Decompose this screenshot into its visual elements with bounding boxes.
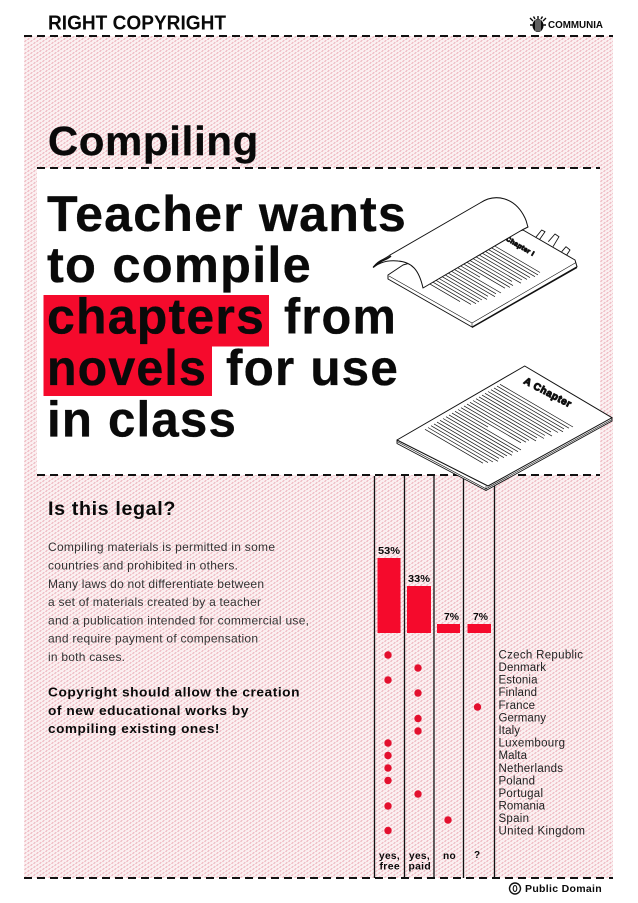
country list: France [498, 700, 535, 712]
top sheet [397, 366, 612, 486]
body text: a set of materials created by a teacher [48, 595, 261, 609]
country list: Estonia [498, 674, 538, 686]
country list: Luxembourg [498, 738, 565, 750]
bar chart: 7% [473, 611, 489, 623]
logo: Communia: COMMUNIA [548, 20, 603, 31]
body text: and a publication intended for commercial use, [48, 614, 309, 628]
section title: Compiling [48, 118, 259, 164]
country list: Malta [498, 750, 528, 762]
bar chart: 33% [408, 573, 431, 585]
body text: Compiling materials is permitted in some [48, 540, 275, 554]
column labels: no [443, 851, 456, 862]
page stack [397, 418, 612, 490]
country list: Poland [498, 775, 535, 787]
country list: Netherlands [498, 763, 563, 775]
body text: countries and prohibited in others. [48, 558, 238, 572]
country list: Spain [498, 813, 529, 825]
callout: conclusion [48, 684, 300, 736]
country list: Denmark [498, 662, 546, 674]
headline: Teacher wants [47, 186, 407, 242]
chapter title: Chapter I [504, 236, 535, 258]
country list: Germany [498, 712, 546, 724]
country list [498, 649, 585, 838]
bar chart: 53% [378, 545, 401, 557]
subheading: Is this legal? [48, 499, 176, 520]
column labels: yes, [409, 851, 430, 862]
country dots [384, 651, 481, 834]
column labels [379, 850, 480, 872]
bar chart [378, 545, 491, 633]
body text: in both cases. [48, 650, 125, 664]
headline: novels [47, 340, 207, 396]
headline: chapters [47, 288, 265, 344]
country list: Finland [498, 687, 537, 699]
turned page [373, 198, 528, 288]
headline: in class [47, 392, 237, 448]
country list: Romania [498, 800, 546, 812]
bar chart: 7% [444, 611, 460, 623]
callout: conclusion: Copyright should allow the creation [48, 684, 300, 700]
illustration: stapled chapter handout [397, 366, 612, 490]
illustration: open book with turned page [373, 198, 577, 328]
headline: to compile [47, 237, 312, 293]
body text: and require payment of compensation [48, 632, 258, 646]
headline [47, 186, 407, 448]
panel: white scenario area [37, 168, 600, 475]
body text: Many laws do not differentiate between [48, 577, 264, 591]
country list: Portugal [498, 788, 543, 800]
body text [48, 540, 309, 664]
callout: conclusion: compiling existing ones! [48, 721, 220, 736]
chart: column rules [374, 476, 494, 878]
book body [388, 230, 577, 327]
chapter title: A Chapter [522, 376, 573, 410]
country list: Italy [498, 725, 520, 737]
text lines [430, 245, 540, 304]
column labels: ? [474, 850, 480, 861]
page header: series title: RIGHT COPYRIGHT [48, 12, 226, 34]
column labels: paid [408, 862, 431, 872]
bookmark tabs [535, 230, 570, 255]
text lines [425, 384, 573, 463]
highlight: chapters, novels [44, 295, 269, 396]
callout: conclusion: of new educational works by [48, 703, 249, 718]
footer: public domain mark: Public Domain [525, 883, 602, 895]
logo: Communia [530, 16, 603, 32]
headline: for use [226, 340, 399, 396]
headline: from [284, 288, 397, 344]
column labels: yes, [379, 851, 400, 862]
country list: Czech Republic [498, 649, 583, 661]
country list: United Kingdom [498, 826, 585, 838]
column labels: free [380, 862, 400, 872]
